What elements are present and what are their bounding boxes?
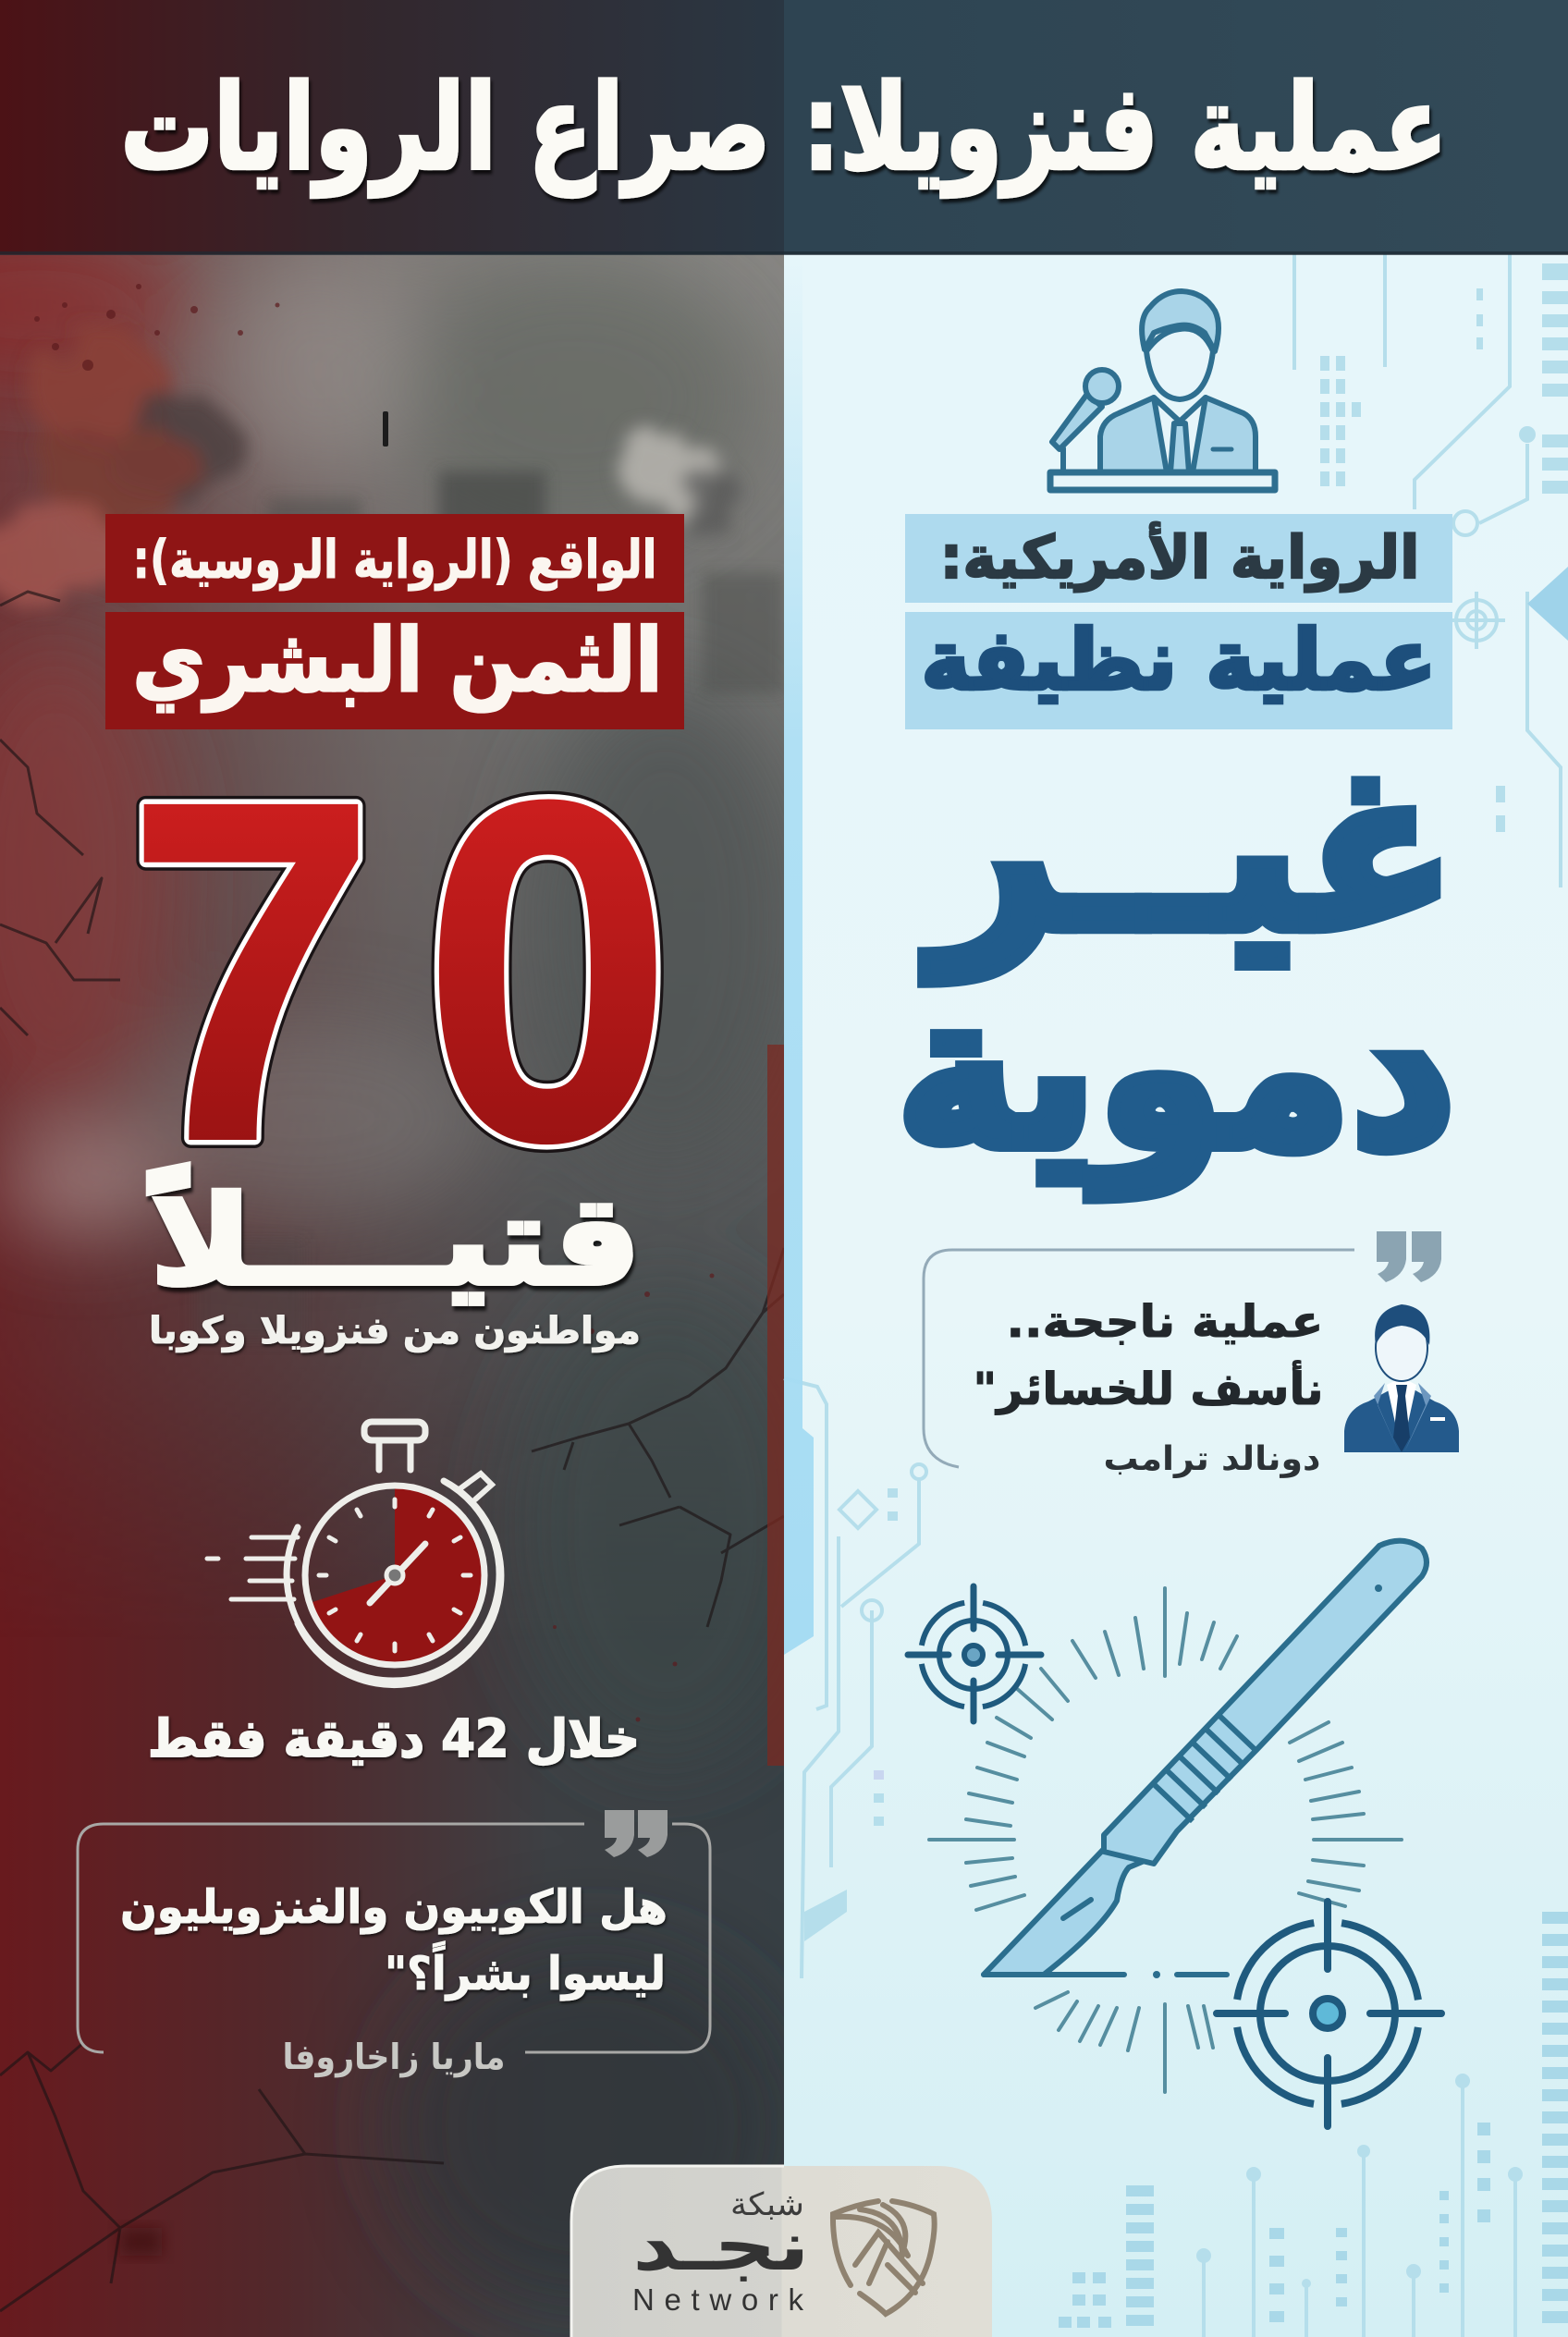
label: reality narrative line 1: الواقع (الرواية الروسية): bbox=[133, 529, 656, 592]
icon: stopwatch with 42 minute sector bbox=[207, 1422, 501, 1685]
icon: spokesman at podium with microphone bbox=[1050, 291, 1275, 490]
quote box: Donald Trump: عملية ناجحة.. bbox=[1006, 1296, 1324, 1348]
label: human cost: الثمن البشري bbox=[133, 610, 662, 712]
icon: small target bbox=[908, 1586, 1041, 1721]
quote box: Maria Zakharova: ليسوا بشراً؟" bbox=[385, 1940, 666, 2001]
big number 70: 70 bbox=[127, 702, 673, 1241]
big word: bloodless: دموية bbox=[897, 948, 1455, 1198]
quote box: Donald Trump: دونالد ترامب bbox=[1104, 1440, 1320, 1478]
label: reality narrative line 1 bbox=[105, 514, 684, 603]
icon: scalpel illustration bbox=[929, 1541, 1427, 2092]
big word: bloodless bbox=[897, 722, 1456, 1198]
killed label: قتيــــلاً bbox=[149, 1164, 641, 1313]
sunburst rays bbox=[929, 1588, 1402, 2092]
stripes top right bbox=[1320, 263, 1568, 494]
debris specks bbox=[34, 284, 714, 1721]
label: clean operation bbox=[905, 612, 1452, 729]
quote box: Maria Zakharova: هل الكوبيون والغنزويليون bbox=[120, 1880, 668, 1935]
dashed guide line bbox=[984, 1972, 1227, 1977]
duration caption: خلال 42 دقيقة فقط bbox=[148, 1709, 640, 1769]
citizens subtitle: مواطنون من فنزويلا وكوبا bbox=[149, 1310, 641, 1352]
icon: man in suit bbox=[1344, 1304, 1459, 1452]
label: clean operation: عملية نظيفة bbox=[921, 612, 1437, 708]
logo tile: نجـد bbox=[632, 2207, 810, 2286]
stripes bottom right bbox=[1059, 1912, 1568, 2328]
text: network name: شبكة bbox=[730, 2186, 804, 2223]
circuit pattern bbox=[784, 254, 1561, 2337]
quote box: Donald Trump: نأسف للخسائر" bbox=[973, 1360, 1324, 1415]
icon: quote marks bbox=[605, 1810, 668, 1857]
big number 70: 70 bbox=[127, 702, 673, 1241]
handle bbox=[1104, 1541, 1427, 1864]
label: American narrative line 1 bbox=[905, 514, 1452, 603]
red side edge bbox=[767, 1045, 784, 1766]
panel: left reality background bbox=[0, 222, 823, 2337]
logo tile bbox=[571, 2166, 992, 2337]
wall cracks bbox=[0, 592, 784, 2311]
header band bbox=[0, 0, 1568, 255]
big word: bloodless: غيــر bbox=[923, 722, 1456, 982]
logo tile: Network bbox=[632, 2282, 812, 2317]
quote box: Maria Zakharova bbox=[78, 1810, 710, 2078]
quote box: Maria Zakharova: ماريا زاخاروفا bbox=[283, 2037, 505, 2078]
icon: shield bbox=[833, 2201, 935, 2314]
icon: quote marks bbox=[1377, 1231, 1441, 1282]
buildings bbox=[266, 466, 784, 695]
quote box: Donald Trump bbox=[924, 1231, 1459, 1478]
panel: right American version background bbox=[784, 254, 1568, 2337]
label: American narrative line 1: الرواية الأمريكية: bbox=[939, 522, 1420, 593]
blade bbox=[984, 1849, 1146, 1975]
icon: large target bbox=[1217, 1902, 1441, 2126]
big number 70: 70 bbox=[127, 702, 673, 1241]
